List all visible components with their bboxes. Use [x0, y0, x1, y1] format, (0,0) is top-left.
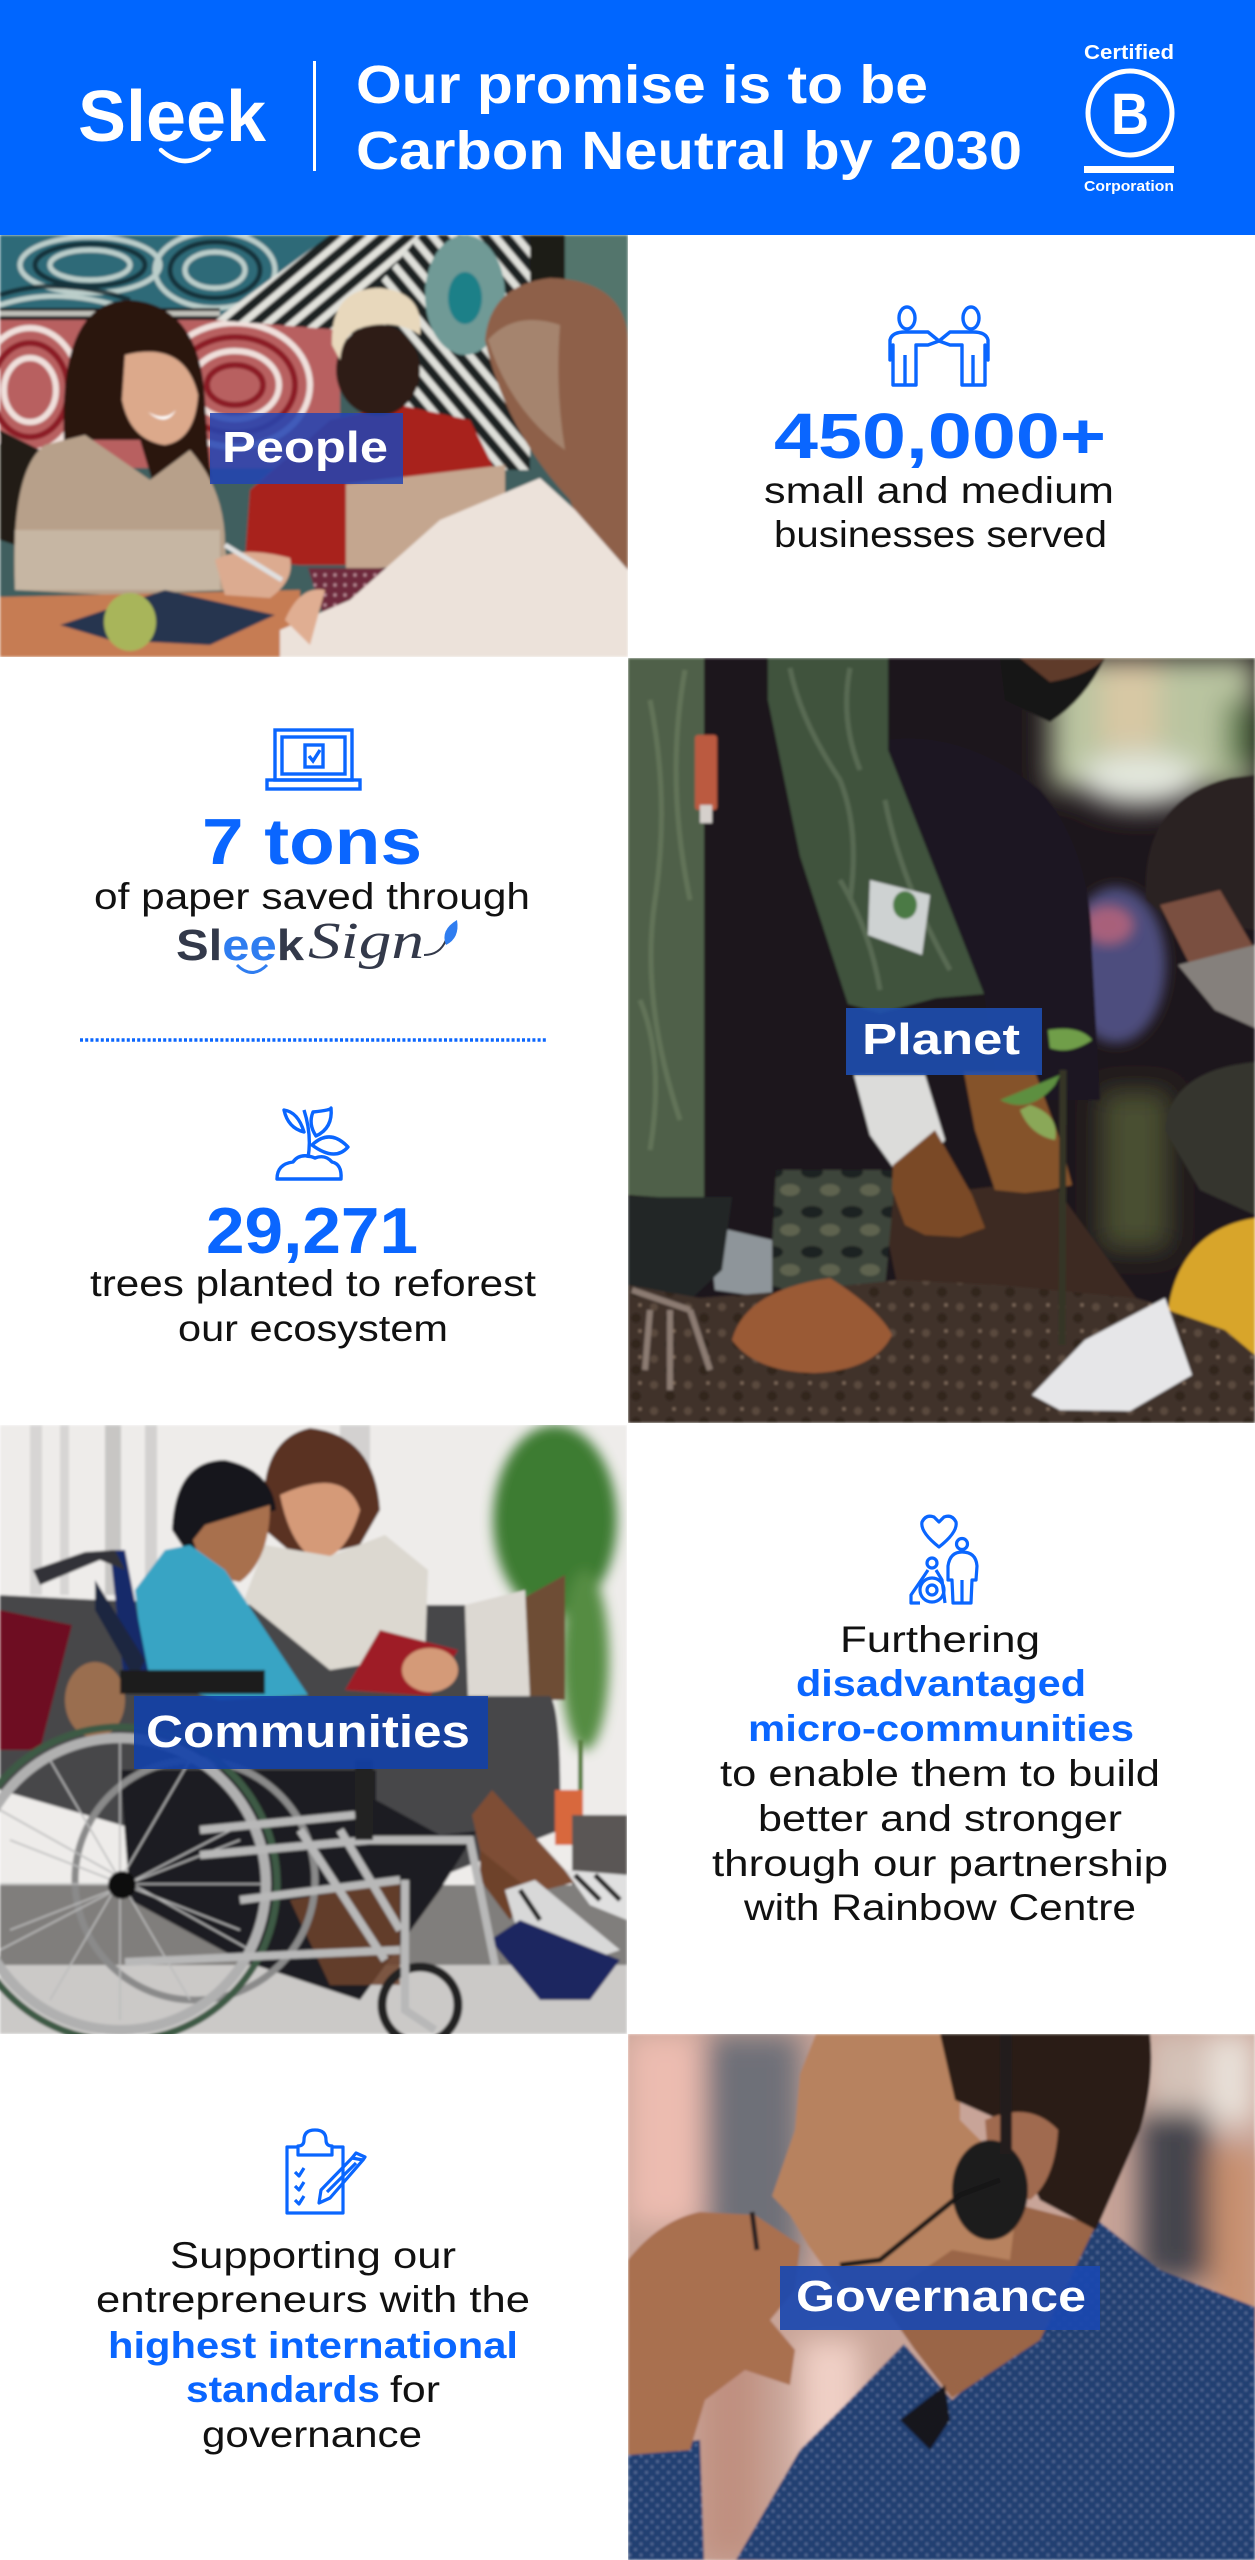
text: international standards: Supporting our	[170, 2235, 456, 2276]
title: Our promise is to be	[356, 55, 928, 115]
panel: communities photo	[0, 1425, 627, 2043]
face	[772, 2034, 1020, 2300]
green shirt middle and sleeve	[768, 658, 984, 1013]
text: furthering micro-communities	[712, 1619, 1168, 1928]
text: international standards: governance	[202, 2414, 422, 2455]
carpet	[0, 1965, 627, 2034]
child's glove	[1032, 1298, 1192, 1411]
boy hair	[172, 1460, 276, 1565]
Certified B Corporation badge: Corporation	[1084, 178, 1174, 195]
neck	[880, 2200, 1096, 2398]
panel: planet photo	[628, 658, 1255, 1423]
child's trousers	[1165, 1062, 1255, 1215]
icon: two people shaking hands	[890, 307, 988, 385]
side table	[572, 1815, 627, 1885]
label: People: People	[222, 423, 388, 472]
blurred colourful shirt behind	[1066, 887, 1166, 1043]
caption: trees planted	[90, 1263, 537, 1349]
text: furthering micro-communities: better and stronger	[758, 1798, 1122, 1839]
caption: businesses: small and medium	[764, 470, 1114, 511]
text: international standards: entrepreneurs with the	[96, 2279, 530, 2320]
icon: sprout	[277, 1108, 348, 1179]
text: international standards	[96, 2235, 530, 2455]
text: international standards: highest international	[108, 2325, 518, 2366]
panel: people photo	[0, 232, 628, 657]
text: furthering micro-communities: through our partnership	[712, 1843, 1168, 1884]
teddy	[65, 1662, 125, 1738]
panel: governance photo	[628, 2034, 1255, 2560]
woman hair	[263, 1428, 380, 1560]
stat: 29,271: 29,271	[206, 1194, 418, 1267]
face and mask	[1022, 658, 1105, 723]
laptop	[346, 465, 505, 570]
Certified B Corporation badge	[1084, 42, 1174, 195]
mic	[729, 2240, 791, 2324]
woman blouse	[244, 1535, 428, 1670]
header banner	[0, 0, 1255, 235]
sapling	[1062, 1070, 1063, 1345]
backrest	[110, 1550, 150, 1690]
woman face	[280, 1483, 360, 1560]
panel: paper saved	[80, 730, 548, 1349]
blurred background	[1050, 658, 1255, 1250]
panel: businesses served	[764, 307, 1114, 555]
garden fork	[632, 1290, 710, 1390]
pillow	[0, 1610, 72, 1750]
title	[356, 55, 1022, 181]
child's mask	[1178, 945, 1255, 1028]
text: furthering micro-communities: to enable them to build	[720, 1753, 1160, 1794]
clod of earth	[732, 1278, 892, 1373]
logo: SleekSign: Sign	[308, 913, 424, 970]
purple back	[1030, 784, 1100, 1100]
label: Governance: Governance	[796, 2272, 1086, 2321]
Certified B Corporation badge: Certified	[1084, 42, 1174, 64]
lap dark	[120, 1770, 490, 2000]
tablet	[345, 1630, 458, 1696]
curtains	[30, 1425, 370, 1595]
hand	[628, 2212, 800, 2455]
text: international standards: standards	[186, 2369, 380, 2410]
icon: heart with caregiver and wheelchair	[911, 1516, 977, 1603]
boot	[628, 1197, 732, 1300]
caption: paper saved: of paper saved through	[94, 876, 530, 917]
green shirt left	[628, 658, 704, 1200]
logo: SleekSign: Sleek	[176, 921, 305, 970]
ear	[985, 2112, 1058, 2200]
sofa	[0, 1595, 560, 1900]
text: international standards: for	[390, 2369, 440, 2410]
table	[0, 590, 300, 657]
floor	[0, 1885, 627, 1975]
wheelchair wheels	[0, 1727, 458, 2043]
label: Governance	[780, 2266, 1100, 2330]
camo pants	[770, 1170, 896, 1295]
red jacket	[245, 405, 510, 565]
logo: SleekSign	[176, 913, 458, 972]
hair	[940, 2034, 1151, 2230]
stat: 7 tons: 7 tons	[202, 805, 422, 878]
label: Planet	[846, 1008, 1042, 1075]
shorts	[376, 1768, 492, 1835]
woman 3 hair	[485, 278, 628, 570]
label: People	[210, 413, 403, 484]
yellow sleeve	[1168, 1218, 1255, 1355]
dotted divider	[80, 1038, 548, 1042]
icon: clipboard and pencil	[287, 2130, 365, 2213]
plant	[493, 1425, 617, 1750]
caption: trees planted: our ecosystem	[178, 1308, 448, 1349]
icon: laptop with checkbox	[267, 730, 360, 789]
silver bag	[708, 1225, 772, 1298]
woman 1 face	[122, 352, 198, 445]
text: furthering micro-communities: Furthering	[840, 1619, 1040, 1660]
footrest	[490, 1920, 620, 2000]
panel: micro-communities	[712, 1516, 1168, 1928]
header divider	[313, 61, 316, 171]
apple	[104, 593, 156, 651]
stat: 450,000+: 450,000+	[774, 400, 1106, 472]
shirt	[736, 2219, 1255, 2560]
collar shadow	[900, 2385, 950, 2450]
woman 1 hair	[62, 298, 210, 480]
text: furthering micro-communities: micro-communities	[748, 1708, 1134, 1749]
frame	[125, 1815, 495, 2030]
boy shirt	[135, 1545, 308, 1700]
brown thigh	[880, 1180, 1136, 1298]
hand and pen	[215, 552, 291, 598]
socks	[505, 1880, 620, 1960]
caption: trees planted: trees planted to reforest	[90, 1263, 537, 1304]
gloved hand right	[964, 1072, 1072, 1193]
label: Communities: Communities	[146, 1706, 470, 1757]
panel: governance	[96, 2130, 530, 2455]
orange pot	[555, 1790, 583, 1845]
notebook	[60, 590, 275, 645]
wood partition	[520, 1575, 565, 1700]
lanyard tag	[695, 735, 717, 810]
legs	[472, 1790, 576, 1900]
soil	[628, 1280, 1255, 1423]
label: Communities	[134, 1696, 488, 1769]
sleeve	[628, 2440, 704, 2560]
blurred background	[628, 2034, 1255, 2560]
title: Carbon Neutral by 2030	[356, 121, 1022, 181]
hand	[402, 1648, 458, 1692]
Sleek logo: Sleek	[78, 77, 267, 157]
headset	[952, 2140, 1028, 2240]
caption: businesses: businesses served	[774, 514, 1107, 555]
label: Planet: Planet	[862, 1015, 1020, 1064]
pen	[752, 2212, 757, 2250]
Certified B Corporation badge: B	[1111, 82, 1149, 147]
sweater	[14, 435, 230, 595]
ID badge	[868, 880, 930, 955]
armrest	[120, 1670, 265, 1694]
woman 3 top	[280, 478, 628, 657]
purse	[307, 566, 384, 612]
text: furthering micro-communities: disadvantaged	[796, 1663, 1086, 1704]
text: furthering micro-communities: with Rainbow Centre	[743, 1887, 1136, 1928]
child's head	[1146, 775, 1255, 930]
gloved hand left	[854, 1075, 945, 1170]
caption: businesses	[764, 470, 1114, 555]
boy face	[193, 1505, 270, 1582]
woman 2 face	[336, 324, 420, 416]
